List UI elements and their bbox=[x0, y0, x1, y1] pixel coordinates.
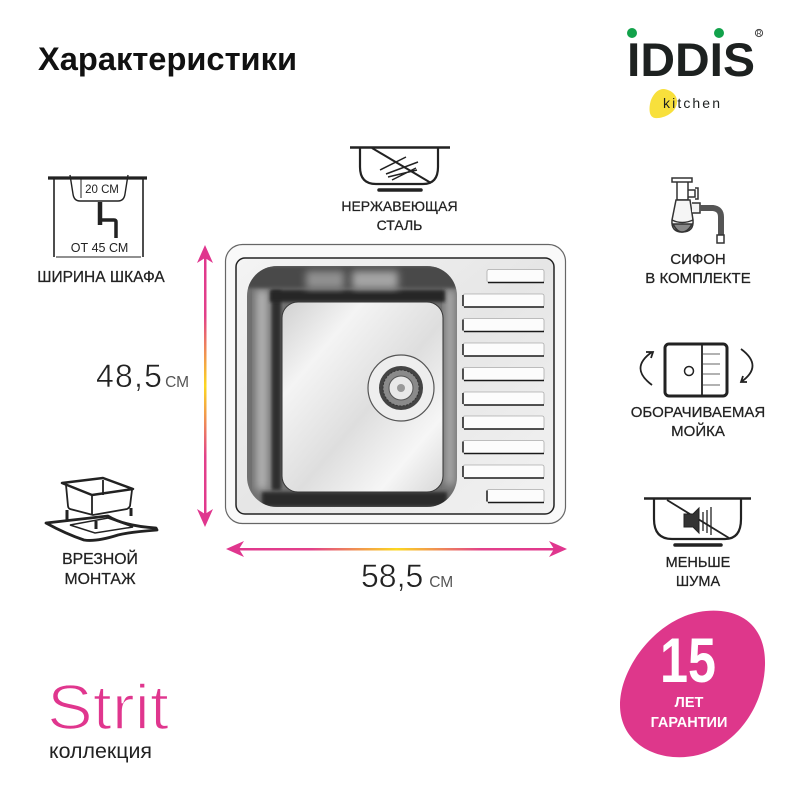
collection name: Strit bbox=[47, 673, 170, 743]
title: Характеристики bbox=[38, 41, 297, 77]
badge: 15 years warranty: ЛЕТ bbox=[675, 695, 703, 711]
label: flush mount: ВРЕЗНОЙ bbox=[62, 549, 138, 568]
icon: cabinet width: ОТ 45 СМ bbox=[71, 241, 128, 255]
label: less noise: МЕНЬШЕ bbox=[666, 555, 731, 571]
icon: stainless steel bbox=[350, 148, 450, 190]
label: siphon: СИФОН bbox=[670, 251, 726, 268]
label: stainless steel bbox=[341, 198, 458, 233]
image: stainless sink bbox=[226, 244, 566, 524]
label: flush mount bbox=[62, 549, 138, 588]
label: stainless steel: СТАЛЬ bbox=[377, 217, 422, 233]
dimension: height: 48,5СМ bbox=[96, 358, 189, 394]
drain bbox=[368, 355, 434, 421]
badge: 15 years warranty: ГАРАНТИИ bbox=[651, 715, 727, 731]
label: less noise: ШУМА bbox=[676, 574, 720, 590]
label: flush mount: МОНТАЖ bbox=[64, 571, 136, 588]
logo: IDDIS kitchen: R bbox=[756, 30, 762, 38]
icon: flush mount bbox=[46, 478, 157, 540]
logo: IDDIS kitchen: IDDIS bbox=[627, 33, 755, 86]
label: stainless steel: НЕРЖАВЕЮЩАЯ bbox=[341, 198, 458, 214]
drainboard ribs bbox=[463, 270, 544, 502]
arrow: height bbox=[197, 245, 213, 527]
logo: IDDIS kitchen bbox=[627, 28, 763, 118]
icon: cabinet width: 20 СМ bbox=[85, 184, 119, 196]
icon: siphon bbox=[672, 178, 724, 243]
label: reversible sink: ОБОРАЧИВАЕМАЯ bbox=[631, 404, 765, 421]
logo: IDDIS kitchen: kitchen bbox=[663, 95, 720, 111]
label: less noise bbox=[666, 555, 731, 590]
icon: reversible sink bbox=[640, 344, 752, 396]
badge: 15 years warranty: 15 bbox=[660, 626, 716, 696]
label: siphon: В КОМПЛЕКТЕ bbox=[645, 270, 751, 287]
arrow: width bbox=[226, 541, 567, 557]
badge: 15 years warranty bbox=[620, 611, 765, 757]
icon: less noise bbox=[644, 498, 751, 545]
collection caption: коллекция bbox=[49, 740, 152, 763]
label: cabinet width: ШИРИНА ШКАФА bbox=[37, 269, 165, 286]
label: siphon bbox=[645, 251, 751, 287]
dimension: width: 58,5 СМ bbox=[361, 558, 453, 594]
label: reversible sink bbox=[631, 404, 765, 440]
icon: cabinet width bbox=[48, 175, 147, 257]
label: reversible sink: МОЙКА bbox=[671, 422, 725, 440]
